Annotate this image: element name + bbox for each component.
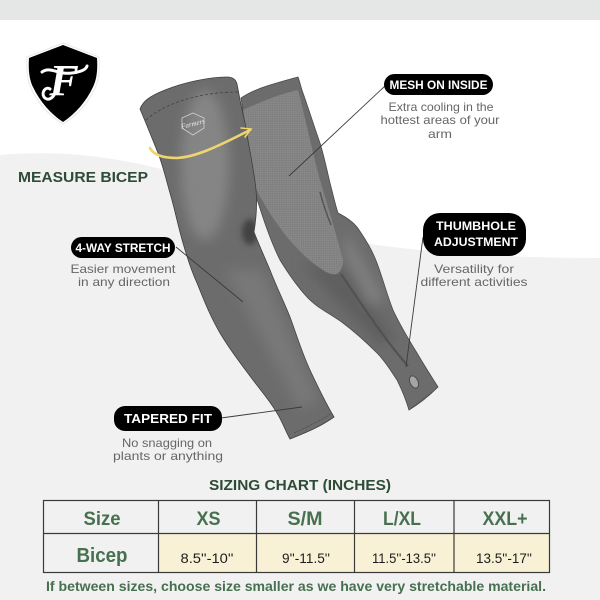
- callout: thumbhole adjustment: ADJUSTMENT: [434, 237, 518, 249]
- callout: thumbhole adjustment: THUMBHOLE: [436, 221, 516, 233]
- table header row: XXL+: [482, 509, 528, 530]
- logo shield: [27, 43, 99, 124]
- callout text: stretch: in any direction: [78, 275, 170, 289]
- logo swash: [42, 66, 87, 99]
- callout: tapered fit: TAPERED FIT: [124, 412, 212, 426]
- table bicep row: 9''-11.5'': [282, 551, 330, 566]
- top seam: [146, 92, 238, 120]
- callout text: thumbhole: Versatility for: [434, 262, 514, 276]
- sizing chart title: SIZING CHART (INCHES): [209, 478, 391, 494]
- thumbhole: [408, 374, 420, 390]
- table bicep row: Bicep: [76, 545, 128, 567]
- table header row: L/XL: [383, 509, 421, 530]
- sleeve: front arm: [140, 77, 334, 439]
- callout: mesh on inside: [289, 74, 500, 176]
- table bicep row: 8.5''-10'': [180, 551, 234, 566]
- table header row: Size: [84, 509, 120, 530]
- sizing table: [44, 500, 550, 572]
- mesh panel: [243, 90, 343, 274]
- callout text: thumbhole: different activities: [420, 275, 528, 289]
- callout: thumbhole adjustment: [406, 213, 528, 367]
- callout: 4-way stretch: 4-WAY STRETCH: [76, 243, 170, 255]
- callout text: mesh: hottest areas of your: [380, 113, 500, 127]
- table header row: XS: [196, 509, 220, 530]
- callout text: tapered: No snagging on: [122, 436, 212, 450]
- sleeve logo: Farmers: [179, 117, 206, 131]
- callout text: mesh: Extra cooling in the: [388, 100, 494, 114]
- table header row: [84, 509, 528, 530]
- table bicep row: 13.5''-17'': [476, 551, 532, 566]
- callout text: mesh: arm: [428, 127, 452, 141]
- callout text: tapered: plants or anything: [113, 449, 223, 463]
- measuring arrow: [150, 128, 251, 158]
- table bicep row: [76, 545, 532, 567]
- heading: measure bicep: MEASURE BICEP: [18, 170, 148, 186]
- callout: 4-way stretch: [70, 237, 243, 302]
- seam: [341, 274, 408, 366]
- sleeve: back arm with mesh: [241, 77, 438, 410]
- table header row: S/M: [288, 509, 322, 530]
- callout text: stretch: Easier movement: [70, 262, 176, 276]
- callout: mesh on inside: MESH ON INSIDE: [390, 80, 488, 92]
- table bicep row: 11.5''-13.5'': [372, 551, 436, 566]
- footnote: If between sizes, choose size smaller as we have very stretchable material.: [46, 579, 546, 594]
- callout: tapered fit: [113, 406, 302, 463]
- logo letter: F: [48, 56, 79, 105]
- sleeve logo: [179, 113, 206, 135]
